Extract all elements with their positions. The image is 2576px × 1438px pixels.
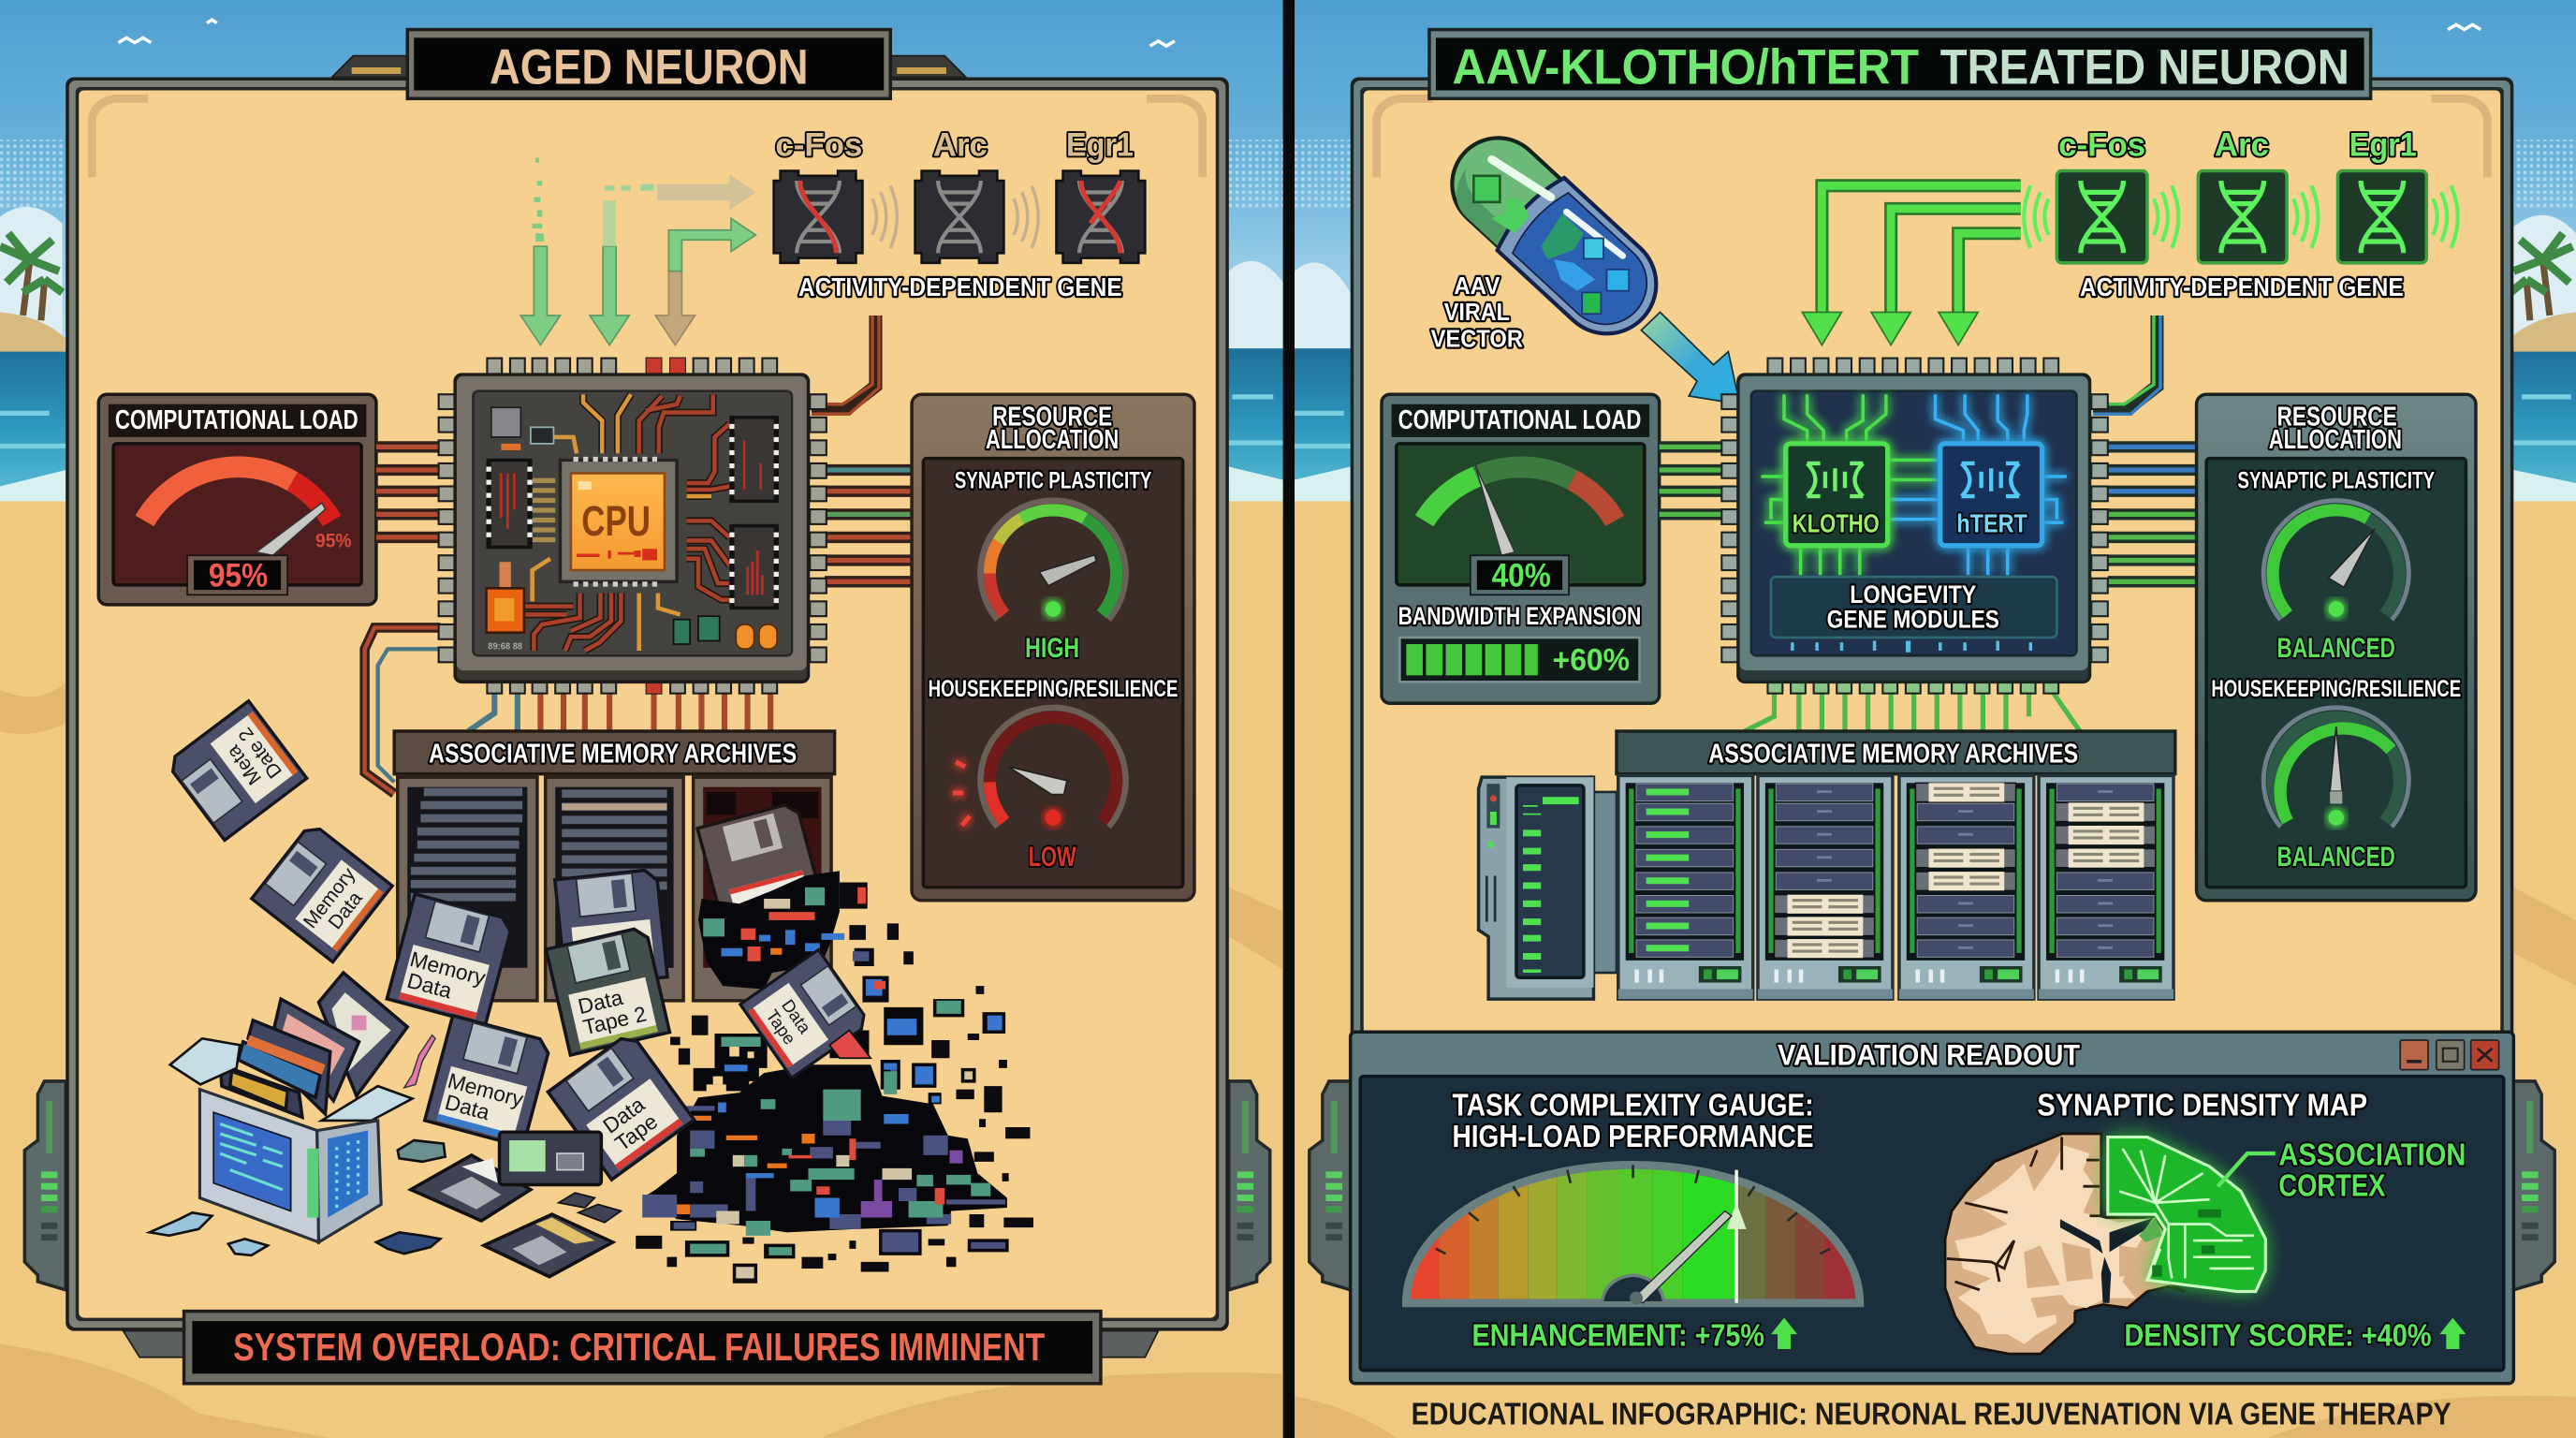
gauge: housekeeping balanced (2263, 708, 2408, 827)
panel: computational load (treated): BANDWIDTH EXPANSION (1398, 601, 1641, 630)
chart: brain synaptic density map (1945, 1134, 2265, 1354)
floppy: memory data blue (425, 1016, 551, 1147)
gauge: synaptic plasticity balanced (2263, 501, 2408, 620)
panel: computational load (aged): 95% (315, 530, 352, 551)
longevity gene modules label: GENE MODULES (1827, 604, 1999, 633)
capsule contents (1492, 159, 1551, 198)
sub-chip lower right (729, 524, 779, 609)
panel: computational load (treated) (1382, 394, 1660, 703)
box of floppies with screens (170, 973, 413, 1242)
box front (199, 1090, 318, 1242)
floppy: shattering data tape: Data (778, 995, 815, 1037)
panel: aged neuron (24, 30, 1270, 1384)
title plate: aged neuron: AGED NEURON (490, 40, 809, 95)
bandwidth bar (1399, 638, 1640, 682)
debris: black chunks (694, 1007, 936, 1091)
panel: resource allocation (aged): HOUSEKEEPING/RESILIENCE (929, 677, 1178, 702)
debris: purple pieces (861, 1151, 962, 1218)
gauge hub and needle (1602, 1211, 1732, 1305)
panel: treated neuron (1310, 30, 2554, 1432)
heading: task complexity gauge (1453, 1089, 1814, 1154)
label: association cortex (2217, 1137, 2466, 1204)
debris: pale pieces (716, 899, 973, 1278)
readout: density score: DENSITY SCORE: +40% (2124, 1318, 2432, 1353)
panel: resource allocation (treated): RESOURCE (2277, 403, 2397, 433)
label: activity-dependent gene: ACTIVITY-DEPENDENT GENE (2080, 272, 2404, 301)
chip: longevity gene modules (1721, 359, 2108, 694)
panel: resource allocation (treated): HOUSEKEEPING/RESILIENCE (2211, 677, 2461, 702)
orange component: 89:68 88 (488, 641, 523, 652)
brain: tan hemisphere (1945, 1134, 2185, 1354)
rack 1 (1618, 775, 1753, 999)
load gauge arc (1425, 465, 1615, 555)
gene labels: Arc (933, 127, 988, 164)
rack 3 (1899, 775, 2034, 999)
cabinet 1 (398, 777, 537, 1001)
cpu (560, 457, 677, 587)
floppy: data tape: Tape (610, 1108, 662, 1155)
deep structures (2024, 1242, 2143, 1318)
heading: task complexity gauge: TASK COMPLEXITY GAUGE: (1453, 1089, 1814, 1123)
panel: resource allocation (aged): ALLOCATION (986, 425, 1119, 455)
floppy: meta data 2 (167, 701, 307, 841)
activity-dependent genes: treated (2024, 127, 2458, 301)
longevity gene modules label: LONGEVITY (1850, 580, 1976, 609)
associative memory archives (treated): ASSOCIATIVE MEMORY ARCHIVES (1708, 739, 2078, 769)
blue traces (1889, 394, 2067, 575)
cards in box (220, 973, 407, 1117)
load readout (1471, 555, 1569, 594)
rack 4 (2039, 775, 2174, 999)
window buttons (2400, 1040, 2499, 1070)
load readout: 95% (209, 558, 268, 594)
green components and LEDs (674, 616, 777, 649)
debris: outlying fragments (636, 882, 1033, 1284)
panel: resource allocation (treated): SYNAPTIC PLASTICITY (2237, 468, 2435, 493)
wires: chip to resource (825, 470, 912, 581)
background: right beach scene (1295, 0, 2576, 1438)
panel: resource allocation (treated): BALANCED (2277, 842, 2395, 873)
longevity gene modules label (1771, 577, 2056, 638)
box flaps (170, 1038, 240, 1084)
brain: glowing association cortex (2108, 1137, 2265, 1292)
debris: blue pieces (718, 930, 1003, 1218)
arrow: vector into chip (1641, 312, 1740, 404)
load gauge arc (144, 467, 332, 555)
gene labels: Arc (2215, 127, 2269, 164)
rack 2 (1758, 775, 1893, 999)
cabinet 3 (694, 777, 831, 1001)
floppy: memory data falling: Memory (300, 863, 360, 932)
small black component (531, 427, 553, 444)
debris: orange pieces (677, 948, 815, 1214)
debris: red pieces (741, 888, 944, 1204)
sub-chip left (487, 459, 533, 549)
floppy: memory data falling: Data (324, 888, 367, 933)
floppy: memory data red: Data (404, 968, 455, 1003)
heading: task complexity gauge: HIGH-LOAD PERFORMANCE (1453, 1120, 1814, 1154)
wires: load to chip (1660, 447, 1723, 514)
panel: computational load (aged): COMPUTATIONAL LOAD (115, 405, 359, 435)
floppy: meta data 2: Date 2 (235, 724, 286, 782)
small gray component (491, 407, 520, 437)
panel: resource allocation (aged): SYNAPTIC PLASTICITY (955, 468, 1151, 493)
floppy: memory data red: Memory (407, 946, 489, 990)
floppy: meta data 2: Meta (222, 741, 266, 788)
gene icons (774, 171, 1145, 263)
debris: black mass lower (642, 1064, 1007, 1232)
icon: AAV viral vector capsule (1431, 117, 1676, 354)
module: klotho (1786, 444, 1888, 546)
floppy: data tape 2: Data (576, 985, 625, 1019)
floppy: data tape 2: Tape 2 (580, 1002, 649, 1039)
gold bars (533, 478, 555, 542)
debris: green and teal pieces (690, 888, 990, 1255)
label: association cortex: ASSOCIATION (2278, 1137, 2466, 1172)
debris: navy pieces (642, 951, 1005, 1252)
panel: computational load (treated): COMPUTATIONAL LOAD (1398, 405, 1641, 435)
wires: chip to resource (2108, 447, 2197, 581)
gene labels: c-Fos (2058, 127, 2145, 164)
frame (1351, 77, 2513, 1384)
floppy: shattering data tape (740, 949, 870, 1078)
gene labels: Egr1 (2349, 127, 2417, 164)
chart: task complexity gauge (1406, 1151, 1860, 1305)
label: AAV viral vector: AAV (1454, 271, 1500, 300)
panel: resource allocation (aged): HIGH (1025, 633, 1079, 664)
heading: synaptic density map: SYNAPTIC DENSITY MAP (2037, 1089, 2367, 1123)
associative memory archives (aged): ASSOCIATIVE MEMORY ARCHIVES (429, 739, 797, 769)
center divider (1283, 0, 1295, 1438)
white matter (1955, 1145, 2156, 1344)
wires: chip to archive (1745, 694, 2080, 731)
floppy: damaged in cabinet (697, 802, 824, 933)
ventricles (2060, 1218, 2154, 1303)
background: left beach scene (0, 0, 1283, 1438)
module: hTERT: hTERT (1956, 509, 2027, 538)
floppy: memory data blue: Memory (446, 1068, 526, 1111)
panel: resource allocation (aged) (912, 394, 1194, 901)
sulci (1947, 1137, 2106, 1290)
wire: chip to genes (812, 315, 879, 414)
arrows: faded signal inputs (520, 157, 755, 345)
floppy: memory data falling (252, 822, 392, 962)
floppy: memory data blue: Data (443, 1090, 492, 1124)
title plate: treated neuron: TREATED NEURON (1940, 40, 2349, 95)
label: AAV viral vector: VIRAL (1444, 298, 1510, 326)
panel: resource allocation (treated): ALLOCATION (2269, 425, 2402, 455)
cpu: CPU (581, 497, 651, 545)
floppy: behind tape 2 (555, 869, 667, 988)
gene labels: Egr1 (1066, 127, 1134, 164)
arrows: gene signal to chip (1802, 185, 2021, 345)
gauge: synaptic plasticity high (980, 501, 1126, 620)
module: klotho: KLOTHO (1793, 509, 1880, 538)
title plate: treated neuron (1429, 30, 2371, 98)
panel: resource allocation (aged): RESOURCE (992, 403, 1112, 433)
chip: aged cpu board (439, 359, 827, 694)
readout: enhancement: ENHANCEMENT: +75% (1472, 1318, 1764, 1353)
label: AAV viral vector: VECTOR (1431, 324, 1523, 352)
red shard over floppy (829, 1030, 871, 1058)
load readout: 40% (1492, 558, 1551, 594)
load readout (187, 555, 287, 594)
wire: chip to genes (2093, 315, 2160, 414)
panel: computational load (aged) (98, 394, 376, 605)
bandwidth bar: +60% (1553, 643, 1630, 678)
box side (317, 1121, 381, 1242)
label: AAV viral vector (1431, 271, 1523, 352)
label: association cortex: CORTEX (2278, 1169, 2385, 1204)
sub-chip upper right (729, 416, 779, 503)
banner: system overload (124, 1312, 1158, 1384)
floppy: data tape 2 (546, 927, 669, 1055)
wires: chip to archive (365, 627, 770, 794)
gauge: housekeeping low (953, 708, 1126, 827)
associative memory archives (treated) (1479, 731, 2175, 999)
flat floppies on floor (411, 1132, 621, 1277)
side connector widgets (1310, 1081, 2554, 1290)
title wings (332, 56, 966, 77)
gene labels: c-Fos (775, 127, 862, 164)
debris: black mass upper (698, 871, 840, 990)
title plate: aged neuron (407, 30, 890, 98)
circuit traces: outlines (524, 394, 729, 651)
frame (66, 77, 1229, 1331)
floppy: data tape (548, 1032, 694, 1180)
title plate: treated neuron: AAV-KLOTHO/hTERT (1453, 40, 1919, 95)
gene icons (2024, 171, 2458, 263)
side connector widgets (24, 1081, 1270, 1290)
loose scraps (150, 1035, 446, 1255)
floppy: data tape: Data (598, 1092, 650, 1138)
debris: sand gaps (713, 1047, 754, 1084)
gene labels (2058, 127, 2417, 164)
panel: validation readout (1351, 1032, 2513, 1384)
gene labels (775, 127, 1134, 164)
circuit traces: red (524, 394, 729, 651)
associative memory archives (aged) (394, 731, 835, 1001)
circuit traces: orange (533, 394, 711, 651)
panel: resource allocation (treated): BALANCED (2277, 633, 2395, 664)
floppy: memory data red (387, 894, 513, 1025)
panel: resource allocation (aged): LOW (1029, 842, 1076, 873)
panel: validation readout: VALIDATION READOUT (1778, 1037, 2080, 1071)
floppy: shattering data tape: Tape (762, 1006, 800, 1048)
panel: resource allocation (treated) (2197, 394, 2476, 901)
green traces (1761, 394, 1940, 575)
banner: system overload: SYSTEM OVERLOAD: CRITICAL FAILURES IMMINENT (233, 1325, 1045, 1369)
module: hTERT (1940, 444, 2042, 546)
floppy disks and spill (150, 701, 1033, 1284)
side server unit (1479, 777, 1617, 999)
cabinet 2 (546, 777, 683, 1001)
orange component (487, 562, 524, 652)
label: activity-dependent gene: ACTIVITY-DEPENDENT GENE (798, 272, 1122, 301)
activity-dependent genes: aged (774, 127, 1145, 301)
wires: load to chip (376, 447, 440, 537)
debris pile (636, 871, 1033, 1284)
